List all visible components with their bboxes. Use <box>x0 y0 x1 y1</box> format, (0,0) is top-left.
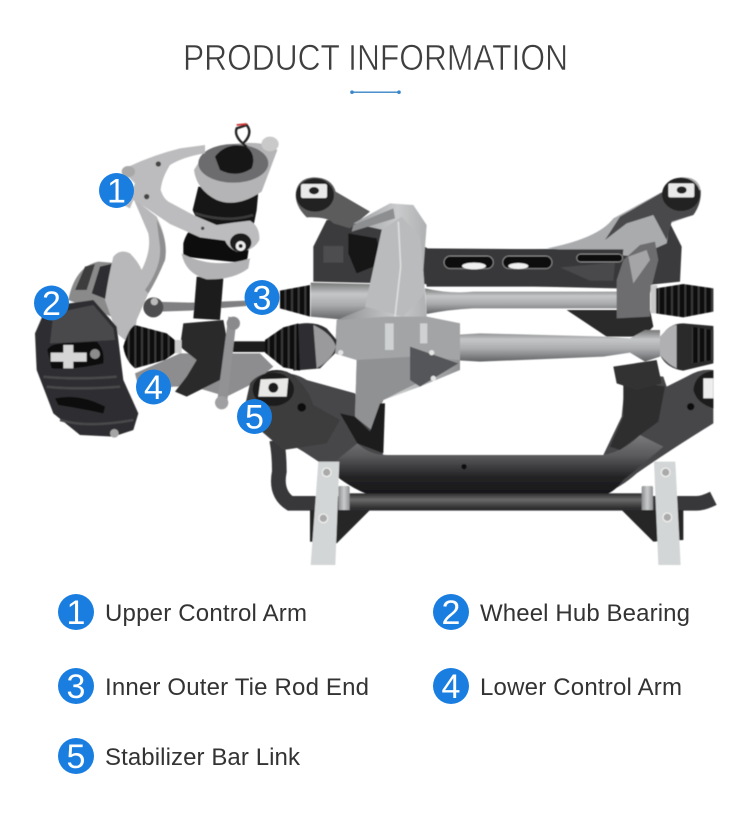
front crossmember <box>260 370 713 493</box>
legend: upper control arm: 1 <box>67 594 85 632</box>
cross plate <box>323 233 623 287</box>
right rear mount and gusset <box>547 177 701 257</box>
left steering boot <box>280 285 310 317</box>
legend: lower control arm <box>433 668 682 706</box>
disc hub shadow <box>92 263 113 300</box>
steering knuckle <box>105 198 166 347</box>
lower right bracket shadow <box>622 510 683 542</box>
legend <box>58 594 690 776</box>
under rack bracket <box>567 310 653 337</box>
rear crossmember towers <box>313 217 682 288</box>
stabilizer bar centre <box>343 493 647 509</box>
right cv joint and boot <box>660 323 713 371</box>
crossmember right shading <box>610 380 665 450</box>
marker 2 <box>34 285 69 323</box>
subframe and drivetrain assembly <box>253 177 713 565</box>
knuckle lower bracket <box>175 320 228 397</box>
upper spring <box>193 187 258 227</box>
brake disc <box>68 262 120 320</box>
lower spring <box>183 220 253 263</box>
left front mount <box>253 370 304 411</box>
marker 5 <box>237 398 272 436</box>
marker 5: 5 <box>245 398 264 436</box>
left corner assembly <box>35 124 340 450</box>
right steering boot <box>656 284 713 317</box>
marker 4: 4 <box>144 369 163 407</box>
marker 3 <box>244 280 280 318</box>
number markers on diagram <box>34 172 280 436</box>
knuckle shadow <box>145 220 166 293</box>
tie rod <box>143 297 247 317</box>
crossmember tube <box>327 435 663 495</box>
legend: tie rod end: 3 <box>67 668 85 706</box>
stabilizer link <box>215 317 240 409</box>
spring highlight <box>195 213 253 219</box>
legend: stabilizer bar link <box>58 738 301 776</box>
legend: lower control arm: 4 <box>442 668 460 706</box>
legend: wheel hub bearing: 2 <box>442 594 460 632</box>
cv boot <box>123 325 182 368</box>
steering gear <box>617 242 658 318</box>
marker 4 <box>136 369 171 407</box>
differential housing <box>335 203 460 430</box>
legend: lower control arm: Lower Control Arm <box>480 674 682 701</box>
lower control arm <box>135 353 273 397</box>
crossmember hole <box>461 464 467 469</box>
steering rack tube <box>425 288 618 314</box>
disc vents <box>75 264 95 290</box>
legend: tie rod end: Inner Outer Tie Rod End <box>105 674 369 701</box>
marker 1: 1 <box>107 172 126 210</box>
caliper <box>35 300 138 438</box>
legend: stabilizer bar link: 5 <box>67 738 85 776</box>
left rear mount <box>296 177 370 228</box>
title underline <box>350 90 401 94</box>
bar clamps <box>338 486 653 513</box>
upper seat top <box>198 144 268 183</box>
marker 3: 3 <box>253 280 271 318</box>
legend: wheel hub bearing: Wheel Hub Bearing <box>480 600 690 627</box>
legend: tie rod end <box>58 668 369 706</box>
left bracket <box>311 462 339 565</box>
right bracket <box>654 462 681 565</box>
legend: stabilizer bar link: Stabilizer Bar Link <box>105 744 301 771</box>
upper control arm <box>122 145 259 252</box>
lower spring seat <box>182 253 250 279</box>
inner shaft <box>232 341 265 352</box>
lower mount <box>243 371 340 450</box>
upper spring seat <box>194 143 277 203</box>
strut dome <box>215 145 253 174</box>
steering rack left housing <box>311 283 377 320</box>
lower left bracket shadow <box>310 510 370 543</box>
right front mount <box>687 371 713 410</box>
legend: upper control arm <box>58 594 307 632</box>
right axle mount <box>613 360 662 390</box>
shock absorber <box>193 277 223 320</box>
marker 2: 2 <box>42 285 61 323</box>
title: PRODUCT INFORMATION <box>183 37 568 78</box>
differential tail shadow <box>340 403 385 453</box>
marker 1 <box>99 172 134 210</box>
stabilizer bar <box>277 440 713 503</box>
strut wires <box>236 124 279 151</box>
inner cv joint <box>265 323 337 371</box>
drive shaft <box>452 330 660 362</box>
suspension illustration <box>35 124 713 565</box>
legend: wheel hub bearing <box>433 594 690 632</box>
legend: upper control arm: Upper Control Arm <box>105 600 307 627</box>
